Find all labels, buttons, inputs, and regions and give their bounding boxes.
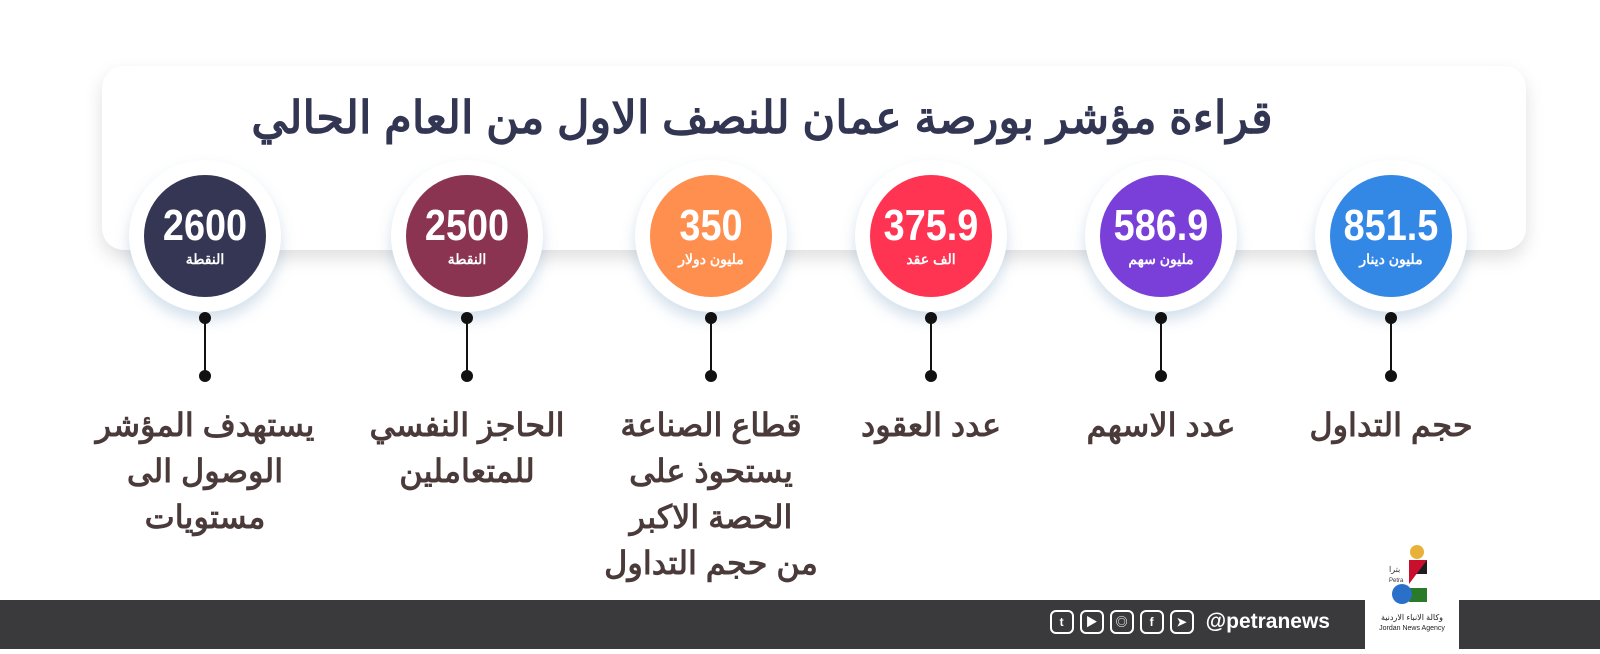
text: مليون دينار [1359, 251, 1423, 267]
item: 586.9 [1079, 175, 1243, 444]
text: 586.9 [1114, 201, 1208, 250]
item: 2600 [94, 175, 314, 536]
logo: Petra [1389, 578, 1404, 584]
logo: Jordan News Agency [1379, 625, 1445, 632]
footer bar [0, 600, 1600, 649]
text: مليون دولار [678, 251, 744, 267]
item: 851.5 [1309, 175, 1473, 444]
text: الوصول الى [127, 453, 283, 489]
text: من حجم التداول [604, 545, 818, 581]
social handles: ➤ [1177, 615, 1187, 629]
social handles: f [1150, 615, 1154, 629]
text: يستهدف المؤشر [96, 407, 314, 443]
text: قطاع الصناعة [620, 407, 802, 443]
title: قراءة مؤشر بورصة عمان للنصف الاول من العام الحالي [251, 92, 1273, 143]
text: الحصة الاكبر [630, 499, 792, 535]
social handles: ◎ [1116, 615, 1128, 629]
text: عدد العقود [861, 407, 1001, 443]
text: النقطة [448, 251, 486, 267]
social handles: ▶ [1086, 615, 1098, 629]
text: عدد الاسهم [1086, 407, 1236, 443]
text: حجم التداول [1309, 407, 1473, 443]
logo [1365, 540, 1459, 649]
text: للمتعاملين [399, 453, 535, 489]
social handles [1050, 610, 1330, 634]
text: الحاجز النفسي [369, 407, 565, 443]
logo: وكالة الانباء الاردنية [1381, 613, 1443, 622]
text: مليون سهم [1128, 251, 1194, 267]
item: 2500 [369, 175, 565, 490]
social handles: t [1060, 615, 1064, 629]
title card [102, 66, 1526, 250]
text: يستحوذ على [629, 453, 793, 489]
text: النقطة [186, 251, 224, 267]
text: 2600 [163, 201, 247, 250]
text: 851.5 [1344, 201, 1438, 250]
text: 2500 [425, 201, 509, 250]
text: 375.9 [884, 201, 978, 250]
logo: بترا [1389, 565, 1400, 574]
text: 350 [679, 201, 743, 250]
item: 350 [604, 175, 818, 582]
text: الف عقد [906, 251, 956, 267]
social handles: @petranews [1206, 610, 1330, 633]
text: مستويات [145, 499, 265, 535]
item: 375.9 [849, 175, 1013, 444]
